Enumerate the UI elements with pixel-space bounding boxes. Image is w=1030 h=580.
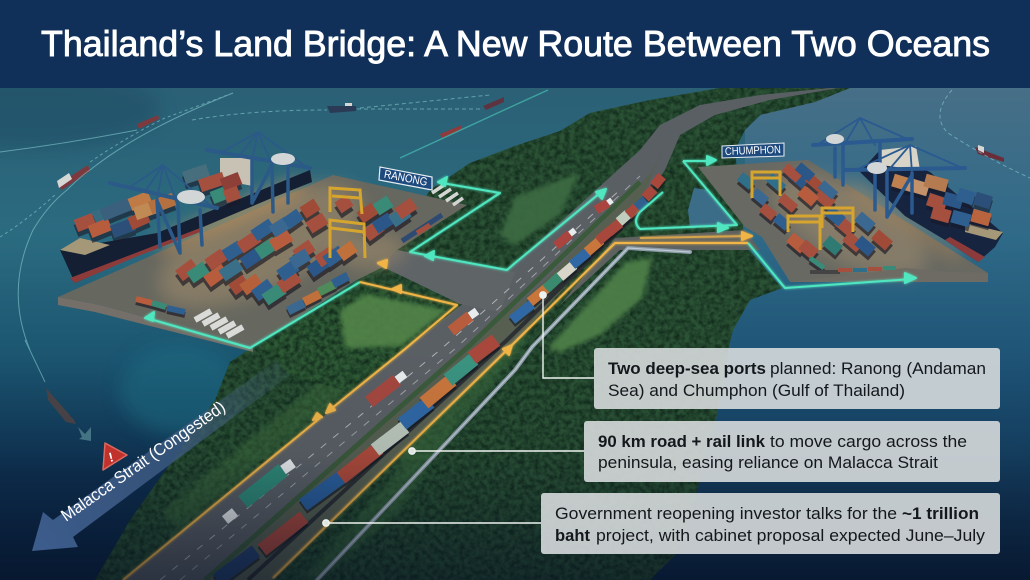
small route arrow toward strait bbox=[78, 427, 91, 441]
highway and rail corridor bbox=[123, 88, 838, 580]
title: Thailand’s Land Bridge: A New Route Between Two Oceans bbox=[41, 23, 990, 64]
Ranong port sign: RANONG bbox=[383, 169, 428, 189]
pipeline bbox=[317, 248, 690, 580]
Chumphon port apron bbox=[698, 153, 988, 297]
title band bbox=[0, 0, 1030, 88]
dashed sea lanes bbox=[0, 90, 1030, 382]
Ranong port apron bbox=[58, 158, 467, 352]
callout: ports bbox=[594, 348, 1000, 409]
Ranong gantry cranes bbox=[110, 132, 310, 253]
callout: road and rail link bbox=[584, 421, 1000, 482]
callout: investor talks: Government reopening investor talks for the bbox=[555, 504, 897, 523]
callout: investor talks: baht bbox=[555, 526, 590, 545]
Malacca Strait arrow bbox=[32, 360, 290, 551]
yellow yard gantries Chumphon bbox=[752, 172, 853, 250]
callout: ports: Sea) and Chumphon (Gulf of Thailand) bbox=[608, 381, 905, 400]
leader lines bbox=[323, 292, 594, 526]
callout: ports: Two deep-sea ports bbox=[608, 359, 766, 378]
Ranong container ship bbox=[60, 158, 312, 283]
callout: investor talks: ~1 trillion bbox=[902, 504, 979, 523]
Chumphon quay cargo row bbox=[810, 268, 896, 272]
Chumphon gantry cranes bbox=[813, 118, 965, 217]
dark vignette bbox=[0, 350, 1030, 580]
callout: road and rail link: peninsula, easing reliance on Malacca Strait bbox=[598, 453, 938, 472]
callout: investor talks bbox=[541, 493, 1000, 554]
Chumphon container stacks bbox=[740, 166, 889, 268]
icon: warning triangle: ! bbox=[107, 449, 115, 465]
Ranong lower stacks and trailers bbox=[136, 185, 463, 336]
highway trucks bbox=[225, 200, 612, 520]
Ranong container stacks bbox=[179, 200, 414, 300]
Chumphon port sign: CHUMPHON bbox=[725, 144, 781, 158]
callout: investor talks: project, with cabinet proposal expected June–July bbox=[596, 526, 986, 545]
small ships bbox=[46, 97, 1004, 424]
rail container train bbox=[217, 176, 662, 580]
callout: ports: planned: Ranong (Andaman bbox=[770, 359, 986, 378]
callout: road and rail link: to move cargo across the bbox=[770, 432, 967, 451]
water lagoon bbox=[688, 188, 738, 228]
callout: road and rail link: 90 km road + rail link bbox=[598, 432, 766, 451]
teal route lines bbox=[145, 156, 916, 348]
yellow yard gantries Ranong bbox=[330, 188, 365, 258]
icon: warning triangle bbox=[103, 443, 127, 470]
Chumphon container ship bbox=[860, 146, 1003, 262]
gold route lines bbox=[123, 232, 752, 580]
peninsula land bbox=[95, 88, 850, 580]
strait label: Malacca Strait (Congested) bbox=[57, 397, 229, 525]
